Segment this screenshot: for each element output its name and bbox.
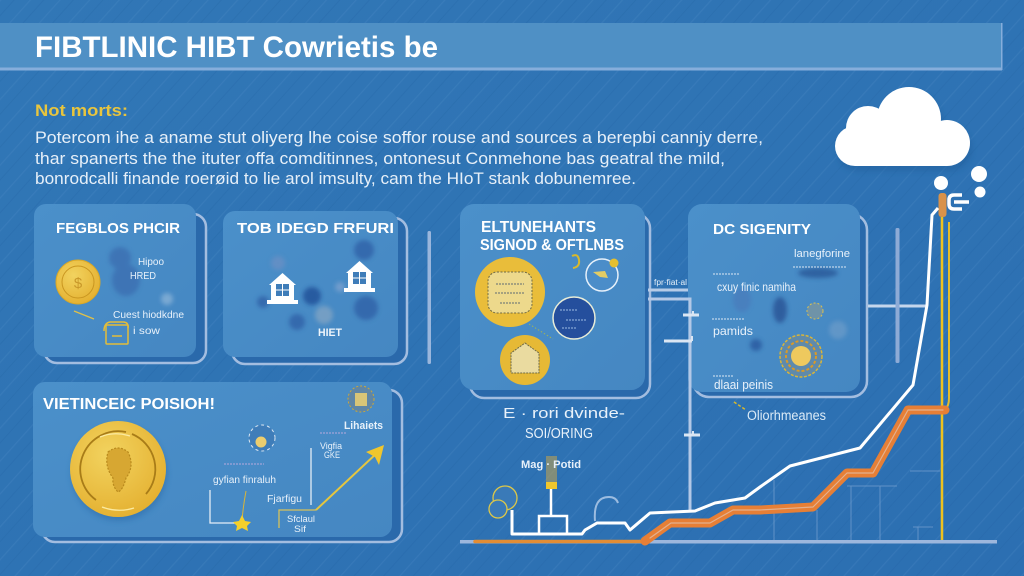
chart labels: Fjarfigu	[267, 494, 302, 505]
panel: VIETINCEIC POISIOH!	[33, 382, 402, 542]
panel heading	[480, 219, 624, 254]
panel text: pamids	[713, 324, 753, 338]
icon: cloud	[835, 87, 972, 171]
icon: gold seal	[780, 335, 822, 377]
icon: twin globes	[489, 486, 517, 518]
icon: large seal coin	[475, 257, 545, 327]
coin labels: Hipoo	[138, 256, 164, 268]
coin labels: HRED	[130, 270, 156, 282]
intro heading: Not morts:	[35, 101, 128, 120]
title: FIBTLINIC HIBT Cowrietis be	[35, 31, 438, 64]
chart: white rising line	[512, 208, 938, 534]
header banner	[0, 23, 1002, 70]
panel text: cxuy finic namiha	[717, 280, 796, 294]
label: rori dvinde: SOI/ORING	[525, 425, 593, 442]
label: rori dvinde: E · rori dvinde-	[503, 405, 625, 422]
label: HIET	[318, 327, 342, 339]
panel text: lanegforine	[794, 248, 850, 260]
icon: small globe	[572, 255, 618, 291]
panel heading: TOB IDEGD FRFURI	[237, 220, 394, 237]
connector label: fpr·fiat·al	[654, 278, 687, 287]
panel heading: ELTUNEHANTS	[481, 219, 596, 236]
panel: ELTUNEHANTS SIGNOD & OFTLNBS	[460, 204, 650, 398]
chart labels: Sfclaul	[287, 514, 315, 524]
panel text	[712, 248, 850, 392]
icon: yellow box	[104, 322, 128, 344]
chart labels: Vigfia	[320, 441, 342, 451]
icon: data dots and connector	[934, 166, 987, 217]
label: Oliorhmeanes: Oliorhmeanes	[747, 408, 826, 423]
decorative data blob	[109, 247, 173, 305]
label: Mag Potid	[521, 456, 581, 482]
icon: small badge	[807, 303, 823, 319]
icon: yellow star	[233, 515, 251, 531]
panel heading: FEGBLOS PHCIR	[56, 220, 180, 237]
connector pipes	[648, 290, 700, 510]
chart: growth lines	[210, 433, 378, 528]
intro text block	[35, 128, 763, 188]
T-bars right of DC panel	[868, 228, 927, 363]
intro text block: Potercom ihe a aname stut oliyerg lhe coise soffor rouse and sources a berepbi cannjy derre,	[35, 128, 763, 147]
decorative network blobs	[257, 240, 378, 330]
intro text block: bonrodcalli finande roerøid to lie arol imsulty, cam the HIoT stank dobunemree.	[35, 169, 636, 188]
panel heading: SIGNOD & OFTLNBS	[480, 237, 624, 254]
chart labels	[213, 420, 383, 534]
arc	[595, 497, 618, 521]
icon: house left	[267, 273, 298, 304]
panel: DC SIGENITY	[688, 204, 867, 397]
intro text block: thar spanerts the the ituter offa comditinnes, ontonesut Conmehone bas geatral the mild,	[35, 149, 725, 168]
chart labels: GKE	[324, 450, 340, 460]
icon: yellow node	[546, 482, 557, 489]
panel text: dlaai peinis	[714, 378, 773, 392]
coin labels: i sow	[133, 325, 160, 337]
icon: blue circuit circle	[553, 297, 595, 339]
chart labels: gyfian finraluh	[213, 475, 276, 486]
icon: small badge	[249, 425, 275, 451]
panel heading: DC SIGENITY	[713, 221, 811, 238]
panel: TOB IDEGD FRFURI	[223, 211, 407, 364]
icon: small gold badge	[348, 386, 374, 412]
icon: gold coin: $	[74, 275, 83, 292]
coin labels: Cuest hiodkdne	[113, 309, 184, 321]
divider bar	[428, 231, 431, 364]
label: rori dvinde	[503, 405, 625, 442]
chart labels: Sif	[294, 524, 307, 534]
icon: large gold coin	[70, 421, 167, 521]
icon: circuit block	[539, 484, 567, 534]
chart: orange rising line	[475, 410, 945, 542]
coin labels	[113, 256, 184, 337]
panel heading: VIETINCEIC POISIOH!	[43, 396, 215, 413]
icon: yellow arrow head	[366, 445, 384, 465]
chart axis	[460, 540, 997, 544]
panel: FEGBLOS PHCIR	[34, 204, 206, 363]
label: Oliorhmeanes	[734, 402, 826, 423]
chart labels: Lihaiets	[344, 420, 383, 432]
decorative data blobs	[733, 268, 847, 351]
icon: house right	[344, 261, 375, 292]
icon: house coin	[500, 335, 550, 385]
label: Mag Potid: Mag · Potid	[521, 459, 581, 471]
chart: faint grid	[774, 471, 940, 540]
icon: gold coin	[56, 260, 100, 319]
chart: yellow vertical line	[942, 217, 949, 540]
